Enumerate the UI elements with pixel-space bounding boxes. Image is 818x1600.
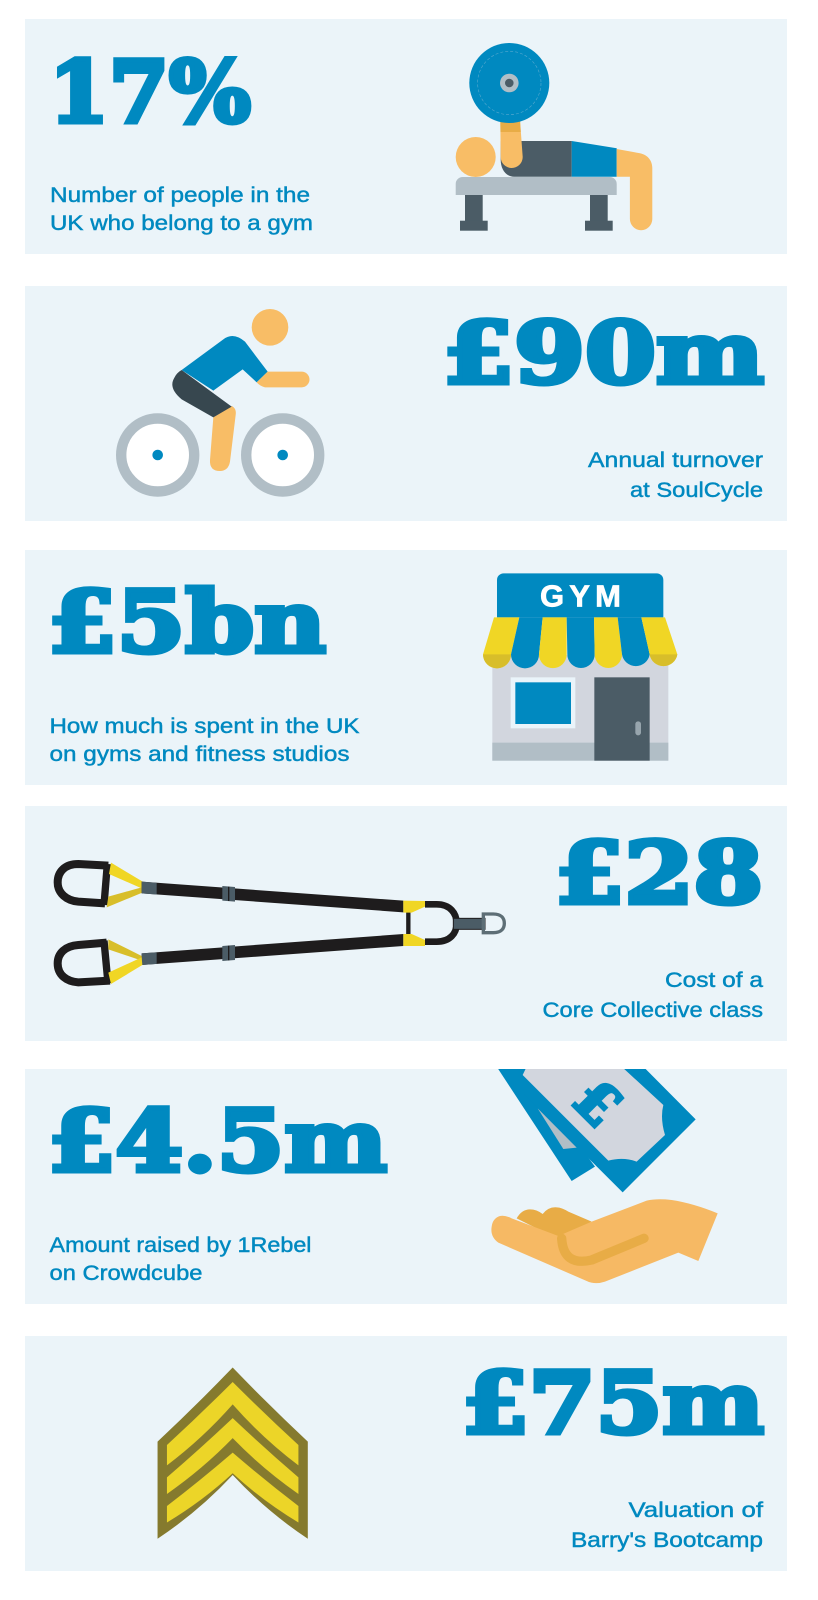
icon: bench press (456, 43, 652, 231)
text: gym membership description: UK who belong to a gym (50, 211, 313, 235)
heading: £28: £28 (555, 824, 763, 924)
text: gym membership description (50, 183, 313, 235)
text: turnover description (588, 448, 763, 502)
text: class cost description: Core Collective class (542, 998, 763, 1022)
panel: £5bn UK spend (25, 550, 787, 785)
text: class cost description (542, 968, 763, 1022)
panel: £90m SoulCycle turnover (25, 286, 787, 521)
text: valuation description: Barry's Bootcamp (571, 1528, 763, 1552)
icon: suspension trainer straps (58, 863, 504, 984)
text: turnover description: Annual turnover (588, 448, 763, 472)
text: gym membership description: Number of people in the (50, 183, 310, 207)
note symbol: pound sign: £ (560, 1066, 634, 1140)
heading: 17%: 17% (49, 43, 251, 143)
icon: cyclist (121, 309, 319, 492)
text: fundraising description: Amount raised by 1Rebel (50, 1233, 312, 1257)
text: fundraising description (50, 1233, 312, 1285)
sign text: GYM: GYM (540, 578, 621, 614)
heading: £5bn: £5bn (48, 573, 326, 673)
icon: gym storefront (483, 573, 677, 761)
icon: banknotes falling into hand (491, 1066, 718, 1283)
text: spend description (50, 714, 360, 766)
text: spend description: How much is spent in the UK (50, 714, 360, 738)
icon: sergeant chevrons (158, 1368, 308, 1539)
heading: £90m: £90m (443, 304, 764, 404)
heading: £4.5m: £4.5m (48, 1092, 387, 1192)
text: fundraising description: on Crowdcube (50, 1261, 202, 1285)
panel: £75m Barry's Bootcamp valuation (25, 1336, 787, 1571)
panel: 17% gym membership (25, 19, 787, 254)
text: spend description: on gyms and fitness studios (50, 742, 350, 766)
panel: £4.5m 1Rebel raise (25, 1066, 787, 1304)
panel: £28 Core Collective class (25, 806, 787, 1041)
heading: £75m: £75m (462, 1354, 764, 1454)
text: class cost description: Cost of a (665, 968, 763, 992)
text: turnover description: at SoulCycle (630, 478, 763, 502)
text: valuation description (571, 1498, 763, 1552)
text: valuation description: Valuation of (628, 1498, 763, 1522)
